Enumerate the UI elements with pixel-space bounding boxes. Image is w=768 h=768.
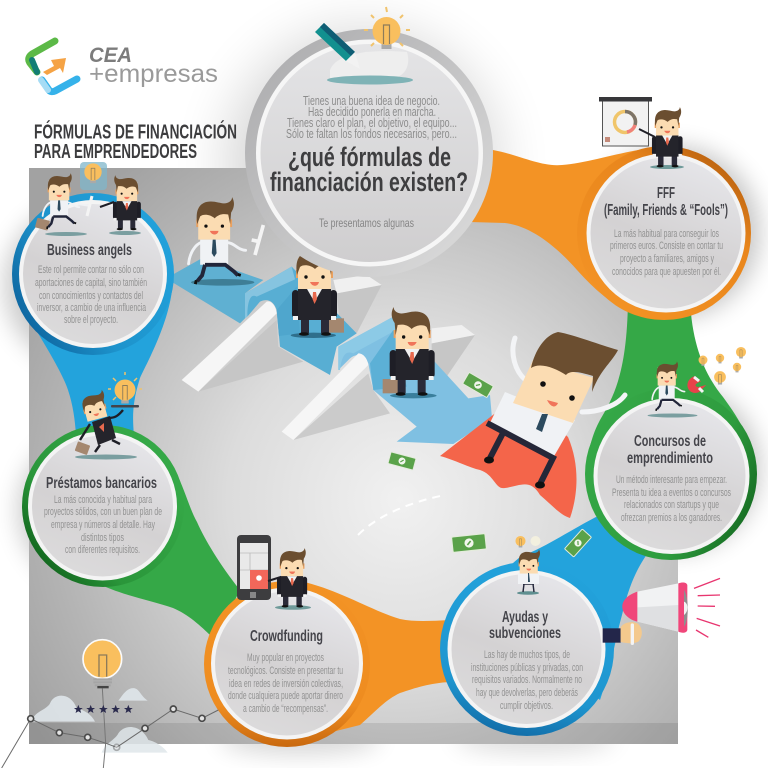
icon: man with two bulbs — [515, 536, 540, 595]
panel: FFF: FFF — [657, 185, 675, 202]
intro text: Has decidido ponerla en marcha. — [308, 104, 436, 119]
panel: business angels: con conocimientos y contactos del — [39, 290, 143, 302]
panel: prestamos bancarios: empresa y números al detalle. Hay — [51, 519, 155, 531]
panel: crowdfunding: Muy popular en proyectos — [247, 652, 324, 664]
panel: ayudas y subvenciones: requisitos variados. Normalmente no — [472, 674, 582, 686]
intro text — [286, 93, 457, 141]
connecting band: orange bottom — [300, 581, 450, 740]
blue stairs — [166, 258, 492, 444]
title: FÓRMULAS DE FINANCIACIÓN — [34, 120, 237, 144]
icon: presentation board and man in suit — [599, 97, 684, 169]
main question: ¿qué fórmulas de — [288, 142, 451, 172]
icon: phone and man in suit — [237, 535, 311, 610]
panel: business angels — [12, 162, 174, 355]
connecting band: green lower left — [95, 470, 240, 640]
panel: ayudas y subvenciones: cumplir objetivos. — [500, 700, 553, 712]
icon: lightbulb, stars, clouds and growth line — [2, 640, 218, 768]
icon: megaphone and hand — [603, 578, 720, 645]
panel: ayudas y subvenciones: hay que devolverlas, pero deberás — [476, 687, 578, 699]
panel: prestamos bancarios: La más conocida y habitual para — [54, 494, 153, 506]
figure: second man in suit with briefcase — [383, 307, 437, 398]
connecting band: green right — [586, 300, 757, 520]
panel: crowdfunding: idea en redes de inversión colectivas, — [229, 678, 343, 690]
panel: crowdfunding — [204, 535, 370, 747]
panel: ayudas y subvenciones: subvenciones — [489, 625, 561, 642]
connecting band: blue left — [30, 290, 172, 435]
panel: prestamos bancarios: Préstamos bancarios — [46, 475, 157, 492]
panel: concursos de emprendimiento: emprendimiento — [627, 450, 713, 467]
panel: FFF: proyecto a familiares, amigos y — [620, 253, 714, 265]
dashed flight path — [358, 495, 445, 535]
panel: prestamos bancarios: con diferentes requisitos. — [65, 544, 140, 556]
title — [34, 120, 237, 163]
front paper shards — [182, 301, 368, 440]
title: PARA EMPRENDEDORES — [34, 141, 197, 163]
panel: business angels: inversor, a cambio de una influencia — [37, 302, 147, 314]
icon: running man with tray and bulb — [75, 372, 142, 460]
panel: FFF — [577, 97, 751, 320]
icon: handshake figures — [35, 162, 141, 236]
connecting band: blue lower right — [470, 515, 660, 700]
panel: ayudas y subvenciones: instituciones públicas y privadas, con — [471, 662, 583, 674]
panel: ayudas y subvenciones — [440, 536, 614, 736]
panel: crowdfunding: Crowdfunding — [250, 628, 323, 645]
connecting band: orange top — [470, 147, 700, 317]
figure: man in suit with briefcase — [291, 247, 344, 338]
panel: business angels: aportaciones de capital, sino también — [35, 277, 147, 289]
panel: prestamos bancarios: proyectos sólidos, con un buen plan de — [44, 506, 162, 518]
panel: crowdfunding: donde cualquiera puede aportar dinero — [228, 690, 343, 702]
back paper shards — [198, 275, 475, 440]
intro text: Sólo te faltan los fondos necesarios, pero... — [286, 126, 457, 141]
panel: business angels: sobre el proyecto. — [64, 314, 118, 326]
panel: prestamos bancarios: distintos tipos — [81, 532, 124, 544]
icon: running man with magnet and bulbs — [648, 347, 746, 418]
logo: CEA +empresas — [29, 41, 218, 92]
main circle — [245, 7, 493, 277]
panel: prestamos bancarios — [22, 372, 184, 587]
panel: business angels: Este rol permite contar no sólo con — [38, 264, 144, 276]
main question: financiación existen? — [270, 167, 468, 197]
staircase arrow with figures — [166, 197, 492, 444]
dollar bills — [388, 372, 591, 557]
figure: running man with diploma — [189, 197, 263, 286]
intro text: Tienes claro el plan, el objetivo, el equipo... — [287, 115, 457, 130]
superhero figure — [440, 332, 625, 518]
panel: ayudas y subvenciones: Las hay de muchos tipos, de — [484, 649, 570, 661]
panel: crowdfunding: tecnológicos. Consiste en presentar tu — [228, 665, 343, 677]
panel: concursos de emprendimiento — [585, 347, 757, 560]
panel: ayudas y subvenciones: Ayudas y — [502, 609, 548, 626]
logo: CEA +empresas: +empresas — [89, 60, 218, 88]
panel: business angels: Business angels — [47, 242, 132, 259]
subheading: Te presentamos algunas — [319, 216, 414, 230]
panel: crowdfunding: a cambio de “recompensas”. — [243, 703, 328, 715]
icon: pencil, bulb and paper — [315, 7, 413, 84]
intro text: Tienes una buena idea de negocio. — [303, 93, 440, 108]
main question — [270, 142, 468, 197]
panel: concursos de emprendimiento: Concursos de — [634, 433, 706, 450]
logo: CEA +empresas: CEA — [89, 44, 132, 67]
